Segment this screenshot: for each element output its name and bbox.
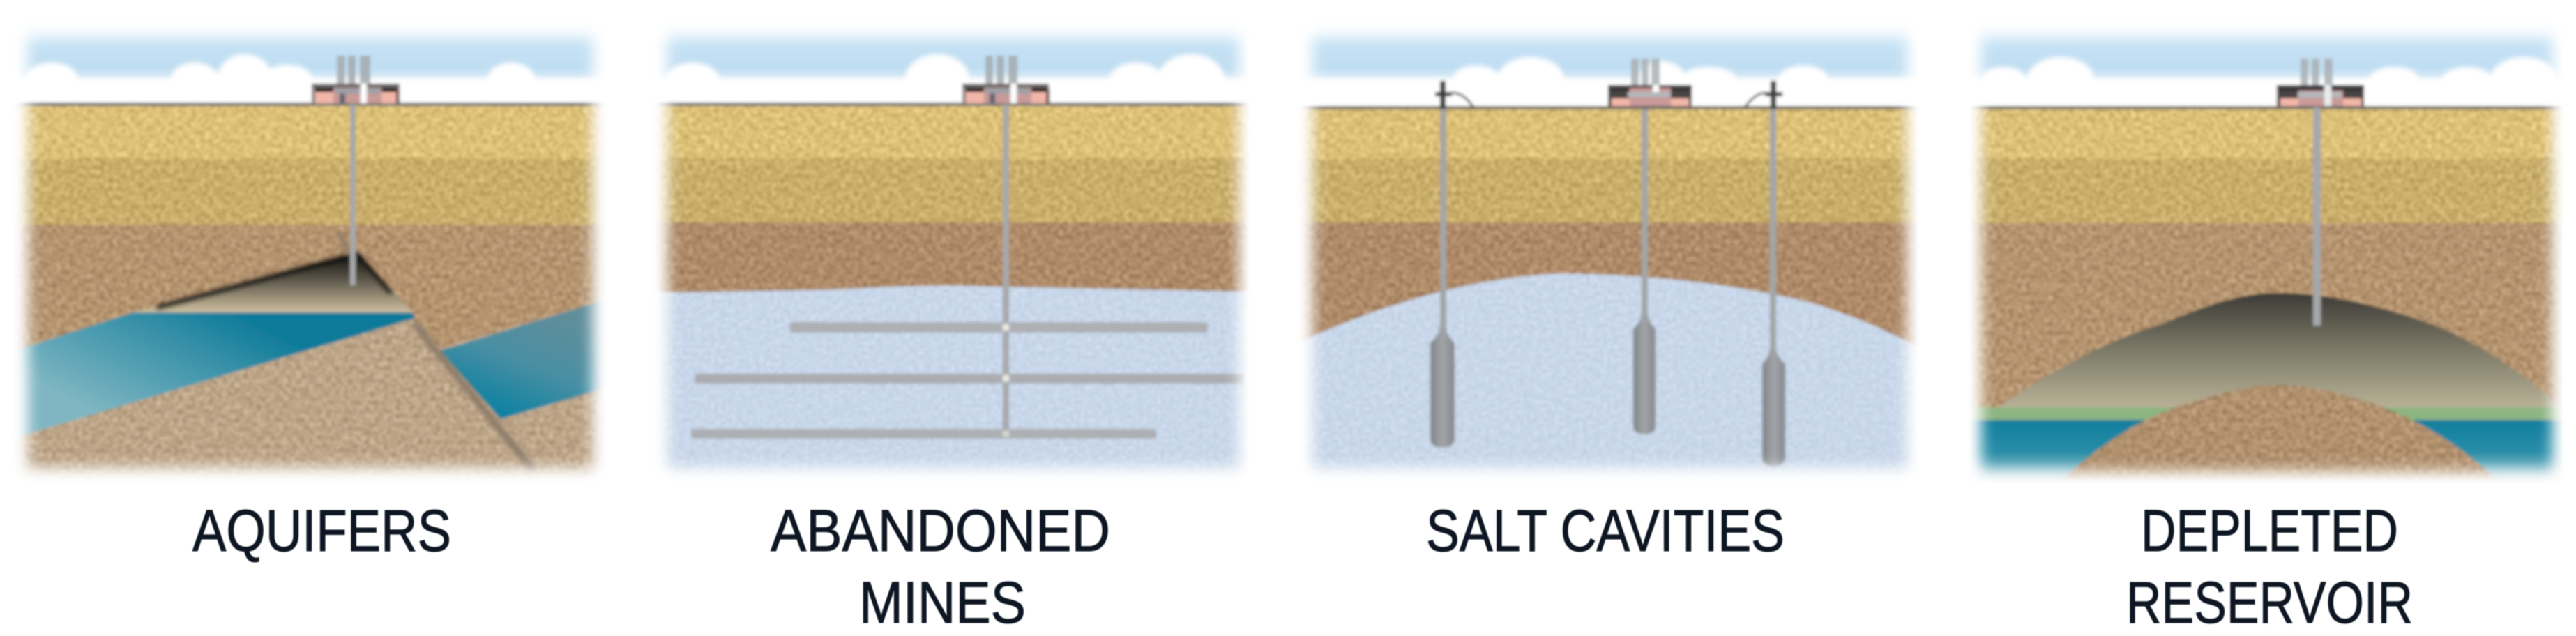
- well centre with cavern: [1633, 109, 1656, 434]
- salt dome: [1297, 273, 1918, 488]
- caption: depleted reservoir: [2126, 498, 2413, 635]
- scene: aquifer cross-section: [14, 21, 607, 490]
- ground surface line: [14, 103, 607, 106]
- wellhead: [312, 56, 400, 103]
- caption: depleted reservoir: RESERVOIR: [2126, 570, 2413, 635]
- sky with clouds: [20, 29, 600, 105]
- gas pocket dark edge: [157, 255, 391, 308]
- rock strata: [1297, 109, 1918, 362]
- rock strata: [649, 106, 1248, 292]
- scene: mine cross-section: [649, 21, 1248, 488]
- rock strata: [14, 106, 607, 490]
- sky with clouds: [1297, 21, 1918, 112]
- mine shaft: [1003, 105, 1009, 430]
- ground surface line: [1297, 106, 1918, 109]
- panel: abandoned mines: [649, 21, 1248, 635]
- caption: aquifers: AQUIFERS: [192, 498, 451, 563]
- ground surface line: [1970, 106, 2563, 109]
- side wellhead right: [1744, 81, 1782, 109]
- panel: aquifers: [14, 21, 607, 563]
- caption: abandoned mines: MINES: [859, 570, 1026, 635]
- gas pocket: [133, 251, 412, 312]
- sky with clouds: [649, 21, 1248, 108]
- scene: salt cavern cross-section: [1297, 21, 1918, 488]
- well right with cavern: [1762, 109, 1785, 467]
- panel: salt cavities: [1297, 21, 1918, 563]
- wellhead: [2277, 59, 2364, 107]
- scene: reservoir cross-section: [1970, 21, 2563, 483]
- side wellhead left: [1435, 81, 1474, 109]
- salt layer: [649, 286, 1248, 488]
- fault line: [340, 232, 534, 471]
- well pipe: [2313, 107, 2321, 326]
- aquifer water left: [14, 312, 416, 438]
- caption: abandoned mines: [771, 498, 1110, 635]
- rock strata: [1970, 109, 2563, 425]
- well left with cavern: [1430, 109, 1455, 448]
- panel: depleted reservoir: [1970, 21, 2563, 635]
- caption: salt cavities: SALT CAVITIES: [1426, 498, 1785, 563]
- water layer: [1970, 420, 2563, 483]
- depleted gas dome: [1980, 293, 2563, 420]
- well pipe: [350, 105, 356, 285]
- aquifer water right: [439, 299, 607, 419]
- ground surface line: [649, 103, 1248, 106]
- mine tunnels: [691, 322, 1245, 439]
- caption: depleted reservoir: DEPLETED: [2141, 498, 2398, 563]
- green seal layer: [1970, 407, 2563, 420]
- inner rock dome: [2061, 385, 2498, 481]
- wellhead: [1608, 59, 1692, 107]
- wellhead: [962, 56, 1050, 103]
- caption: abandoned mines: ABANDONED: [771, 498, 1110, 563]
- sky with clouds: [1970, 21, 2563, 112]
